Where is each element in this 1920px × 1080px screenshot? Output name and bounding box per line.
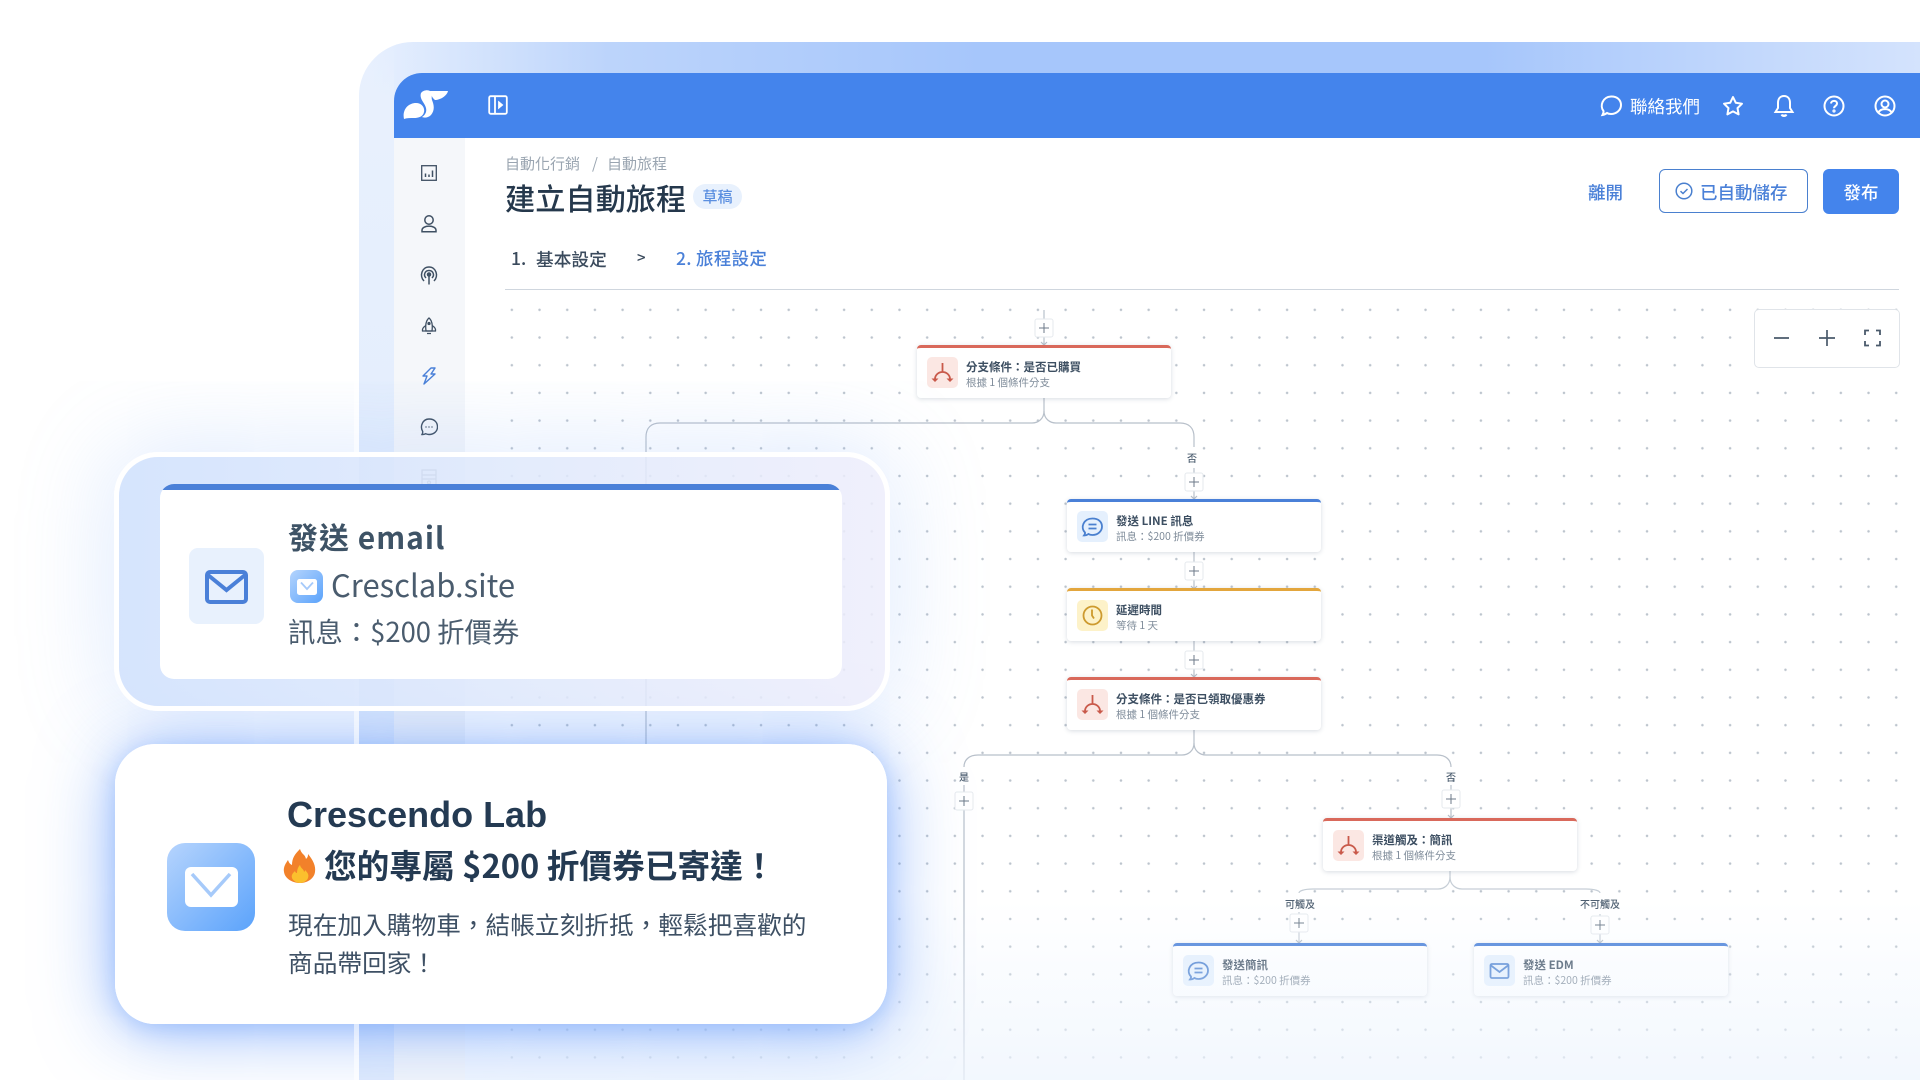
app window (394, 73, 1920, 1080)
logo (404, 90, 448, 119)
icon: person (421, 215, 437, 232)
node: delay: 延遲時間 (1116, 602, 1162, 618)
icon: branch (1077, 689, 1108, 720)
body copy: 現在加入購物車，結帳立刻折抵，輕鬆把喜歡的 (288, 906, 806, 942)
node: delay (1067, 588, 1321, 641)
icon: flame (284, 849, 316, 883)
breadcrumb: 自動化行銷 (505, 153, 580, 174)
blue top bar (160, 484, 842, 490)
body copy: 商品帶回家！ (288, 944, 436, 980)
icon: mail (1484, 955, 1515, 986)
badge: draft: 草稿 (702, 186, 732, 207)
icon: check circle (1675, 182, 1693, 200)
subject line: 您的專屬 $200 折價券已寄達！ (324, 841, 776, 888)
icon: chat (1077, 511, 1108, 542)
node: send LINE: 發送 LINE 訊息 (1116, 513, 1193, 529)
branch labels: 不可觸及 (1580, 896, 1620, 911)
breadcrumb (505, 153, 667, 174)
branch labels: 否 (1446, 769, 1456, 784)
node: branch purchased: 根據 1 個條件分支 (966, 375, 1050, 390)
icon: chat bubble (1600, 96, 1622, 116)
step arrow: > (637, 247, 646, 268)
panel: email node card (114, 452, 890, 711)
node: send SMS (1173, 943, 1427, 996)
branch labels (959, 450, 1620, 911)
page title: 建立自動旅程 (505, 175, 686, 219)
header bar (394, 73, 1920, 138)
email card glow (114, 452, 890, 711)
icon: report (421, 165, 437, 181)
icon: clock (1077, 600, 1108, 631)
node: branch coupon: 根據 1 個條件分支 (1116, 707, 1200, 722)
step 1: 1. (511, 246, 526, 271)
button: autosaved: 已自動儲存 (1700, 180, 1788, 205)
breadcrumb: / (592, 153, 598, 174)
icon: mail box (189, 548, 264, 624)
app frame (359, 42, 1920, 1080)
branch labels: 可觸及 (1285, 896, 1315, 911)
icon: star (1723, 96, 1743, 116)
sender domain: Cresclab.site (331, 561, 515, 606)
leave link: 離開 (1588, 180, 1623, 205)
node: send EDM (1474, 943, 1728, 996)
node: delay: 等待 1 天 (1116, 618, 1158, 633)
sender name: Crescendo Lab (287, 794, 547, 835)
frame highlight strip (354, 100, 359, 1080)
icon: help (1824, 96, 1844, 116)
node: send SMS: 發送簡訊 (1222, 957, 1268, 973)
icon: store (422, 470, 436, 484)
icon: small envelope app (290, 570, 323, 603)
body copy (288, 906, 806, 980)
node: channel reach: 渠道觸及：簡訊 (1372, 832, 1452, 848)
icon: broadcast (420, 266, 438, 284)
icon: user (1874, 96, 1896, 116)
button: publish (1823, 169, 1899, 214)
sidebar icons (420, 165, 438, 484)
node: send EDM: 訊息：$200 折價券 (1523, 973, 1612, 988)
node: channel reach (1323, 818, 1577, 871)
icon: message (420, 418, 438, 436)
email card title: 發送 email (288, 514, 445, 558)
flow canvas dots (498, 296, 1920, 1080)
zoom controls (1754, 309, 1900, 368)
branch labels: 是 (959, 769, 969, 784)
icon: zoom controls glyphs (1774, 330, 1881, 346)
node: send EDM: 發送 EDM (1523, 957, 1574, 973)
node: branch coupon (1067, 677, 1321, 730)
icon: rocket (422, 317, 436, 334)
node: branch purchased (917, 345, 1171, 398)
breadcrumb: 自動旅程 (607, 153, 667, 174)
node: channel reach: 根據 1 個條件分支 (1372, 848, 1456, 863)
node: branch coupon: 分支條件：是否已領取優惠券 (1116, 691, 1266, 707)
contact us: 聯絡我們 (1630, 94, 1700, 119)
icon: panel toggle (488, 95, 508, 115)
bottom fade overlay (465, 900, 1920, 1080)
step 1: 基本設定 (536, 246, 607, 272)
node: branch purchased: 分支條件：是否已購買 (966, 359, 1081, 375)
icon: branch (927, 357, 958, 388)
node: send LINE (1067, 499, 1321, 552)
message line: 訊息：$200 折價券 (288, 610, 519, 650)
branch labels: 否 (1187, 450, 1197, 465)
icon: branch (1333, 830, 1364, 861)
step 2: 2. 旅程設定 (676, 246, 767, 271)
node: send LINE: 訊息：$200 折價券 (1116, 529, 1205, 544)
sidebar (394, 138, 465, 1080)
icon: email app (167, 843, 255, 931)
badge: draft (693, 184, 742, 209)
button: autosaved (1659, 169, 1808, 213)
icon: bolt (422, 367, 436, 385)
email card inner (160, 484, 842, 679)
panel: email preview card (115, 744, 887, 1024)
node: send SMS: 訊息：$200 折價券 (1222, 973, 1311, 988)
promo card glow (115, 744, 887, 1024)
icon: chat (1183, 955, 1214, 986)
divider line (505, 289, 1899, 290)
icon: bell (1774, 95, 1794, 117)
button: publish: 發布 (1844, 180, 1878, 205)
